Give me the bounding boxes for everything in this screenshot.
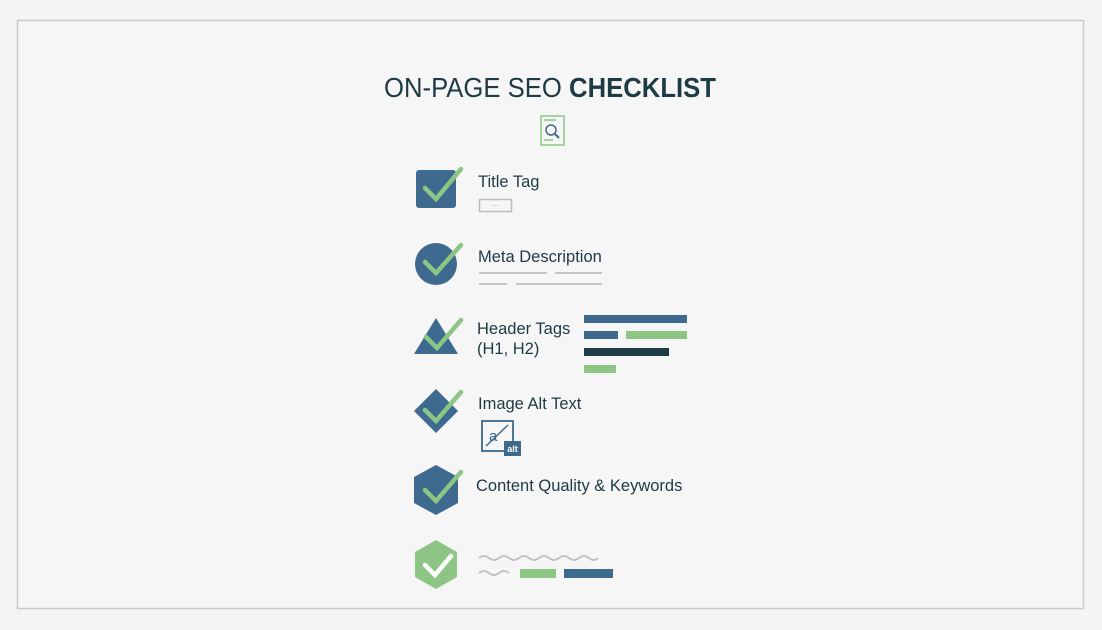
- item: title tag: [416, 169, 539, 212]
- item: image alt text: [414, 389, 582, 456]
- item: header tags: Header Tags: [477, 320, 570, 338]
- item: content quality: [414, 465, 682, 515]
- item: image alt text: Image Alt Text: [478, 395, 582, 413]
- item: meta description: Meta Description: [478, 248, 602, 266]
- icon: document search: [541, 116, 564, 145]
- item: title tag: ···: [490, 200, 500, 210]
- item: header tags: (H1, H2): [477, 340, 539, 358]
- item: header tags: [414, 315, 687, 373]
- item: image alt text: alt: [507, 444, 518, 454]
- item: image alt text: a: [489, 428, 498, 445]
- item: title tag: Title Tag: [478, 173, 539, 191]
- item: meta description: [415, 243, 602, 285]
- item: final check: [415, 540, 613, 589]
- title: ON-PAGE SEO CHECKLIST: [384, 72, 716, 103]
- item: content quality: Content Quality & Keywords: [476, 477, 682, 495]
